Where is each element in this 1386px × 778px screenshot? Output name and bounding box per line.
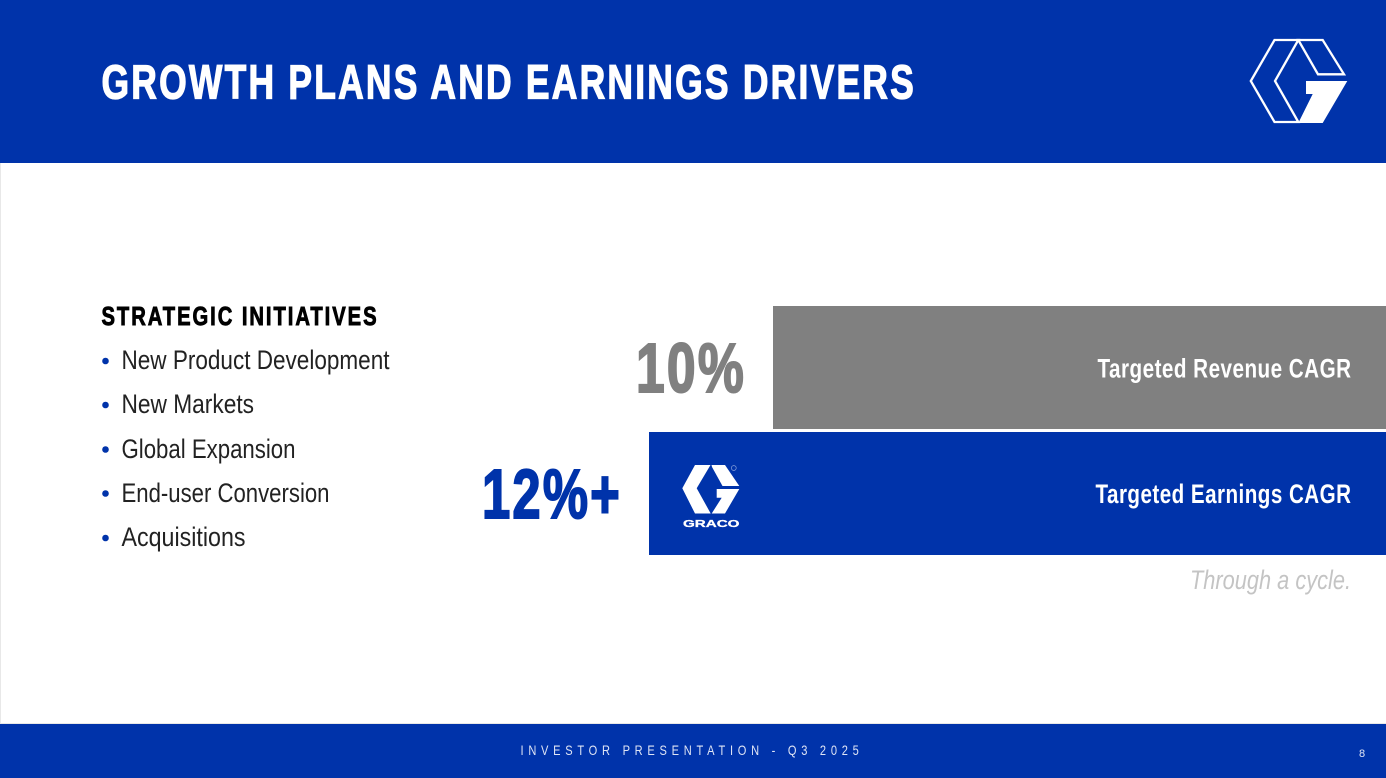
heading: strategic initiatives: STRATEGIC INITIATIVES [102,301,378,331]
list item: End-user Conversion: End-user Conversion [122,478,330,508]
icon: Graco logo [682,465,740,530]
bar: targeted earnings CAGR [649,432,1386,555]
metric: 10%: 10% [636,329,746,407]
note: through a cycle: Through a cycle. [1190,565,1351,595]
list item: Global Expansion: Global Expansion [122,434,296,464]
title: GROWTH PLANS AND EARNINGS DRIVERS [102,56,916,110]
header band [0,0,1386,163]
icon: outline logo [1251,40,1347,123]
icon: Graco logo: GRACO [683,518,740,530]
page number: 8 [1359,748,1365,760]
footer text: INVESTOR PRESENTATION - Q3 2025 [520,742,864,758]
metric: 12%+: 12%+ [482,455,622,533]
bar: targeted revenue CAGR [773,306,1386,429]
list item: New Markets: New Markets [122,389,254,419]
list item: Acquisitions: Acquisitions [122,522,246,552]
list: initiatives [102,345,390,552]
footer band [0,724,1386,778]
list item: New Product Development: New Product Development [122,345,390,375]
